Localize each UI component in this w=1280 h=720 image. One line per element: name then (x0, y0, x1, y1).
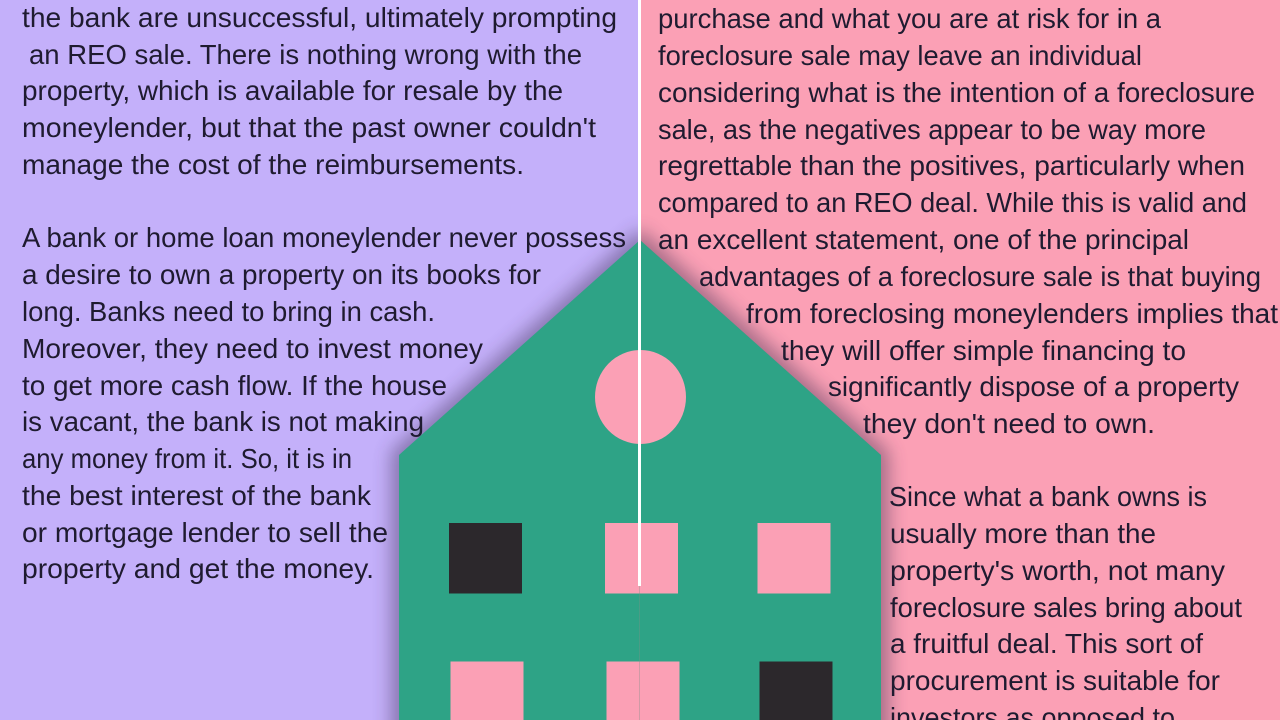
white centre divider line (638, 0, 641, 586)
house body (399, 240, 881, 720)
text block: right column, first paragraph: foreclosure sale may leave an individual (658, 40, 1142, 71)
house illustration (399, 240, 881, 720)
panel: purple left background (0, 0, 640, 720)
text block: right column, first paragraph: sale, as the negatives appear to be way more (658, 114, 1206, 145)
text block: right column, second paragraph: usually more than the (890, 518, 1156, 549)
text block: right column, first paragraph: compared to an REO deal. While this is valid and (658, 187, 1247, 218)
text block: left column, second paragraph: or mortgage lender to sell the (22, 517, 388, 548)
text block: left column, first paragraph: moneylender, but that the past owner couldn't (22, 112, 596, 143)
round attic window (595, 350, 686, 444)
text block: right column, first paragraph: they will offer simple financing to (781, 335, 1186, 366)
text block: right column, second paragraph (889, 481, 1242, 720)
text block: left column, first paragraph: an REO sale. There is nothing wrong with the (29, 39, 582, 70)
window: pink, top centre (605, 523, 678, 594)
text block: right column, second paragraph: property's worth, not many (890, 555, 1225, 586)
text block: left column, first paragraph: manage the cost of the reimbursements. (22, 149, 524, 180)
text block: left column, second paragraph: the best interest of the bank (22, 480, 372, 511)
text block: left column, second paragraph: is vacant, the bank is not making (22, 406, 424, 437)
text block: right column, first paragraph: from foreclosing moneylenders implies that (746, 298, 1278, 329)
window: pink, bottom centre (606, 662, 680, 720)
text block: left column, second paragraph: any money from it. So, it is in (22, 443, 352, 474)
window: dark, top left (449, 523, 522, 594)
text block: right column, first paragraph: purchase and what you are at risk for in a (658, 3, 1161, 34)
panel: pink right background (640, 0, 1280, 720)
text block: left column, second paragraph: A bank or home loan moneylender never possess (22, 222, 626, 253)
text block: right column, first paragraph: considering what is the intention of a foreclosure (658, 77, 1255, 108)
text block: right column, first paragraph: advantages of a foreclosure sale is that buying (699, 261, 1261, 292)
text block: left column, second paragraph: long. Banks need to bring in cash. (22, 296, 435, 327)
text block: right column, second paragraph: foreclosure sales bring about (890, 592, 1242, 623)
text block: right column, first paragraph: they don't need to own. (863, 408, 1155, 439)
text block: left column, first paragraph: the bank are unsuccessful, ultimately prompting (22, 2, 617, 33)
text block: left column, first paragraph (22, 2, 617, 180)
house drop shadow (391, 229, 889, 720)
window: pink, bottom left (450, 662, 524, 720)
text block: right column, first paragraph (658, 3, 1278, 439)
text block: left column, first paragraph: property, which is available for resale by the (22, 75, 563, 106)
text block: right column, first paragraph: regrettable than the positives, particularly when (658, 150, 1245, 181)
text block: right column, first paragraph: an excellent statement, one of the principal (658, 224, 1189, 255)
text block: right column, second paragraph: Since what a bank owns is (889, 481, 1207, 512)
text block: left column, second paragraph: a desire to own a property on its books for (22, 259, 541, 290)
text block: left column, second paragraph: Moreover, they need to invest money (22, 333, 483, 364)
text block: left column, second paragraph: to get more cash flow. If the house (22, 370, 447, 401)
window: dark, bottom right (760, 662, 832, 720)
window: pink, top right (758, 523, 830, 594)
text block: right column, second paragraph: procurement is suitable for (890, 665, 1220, 696)
text block: right column, second paragraph: a fruitful deal. This sort of (890, 628, 1203, 659)
text block: right column, first paragraph: significantly dispose of a property (828, 371, 1239, 402)
text block: left column, second paragraph: property and get the money. (22, 553, 374, 584)
text block: left column, second paragraph (22, 222, 626, 584)
